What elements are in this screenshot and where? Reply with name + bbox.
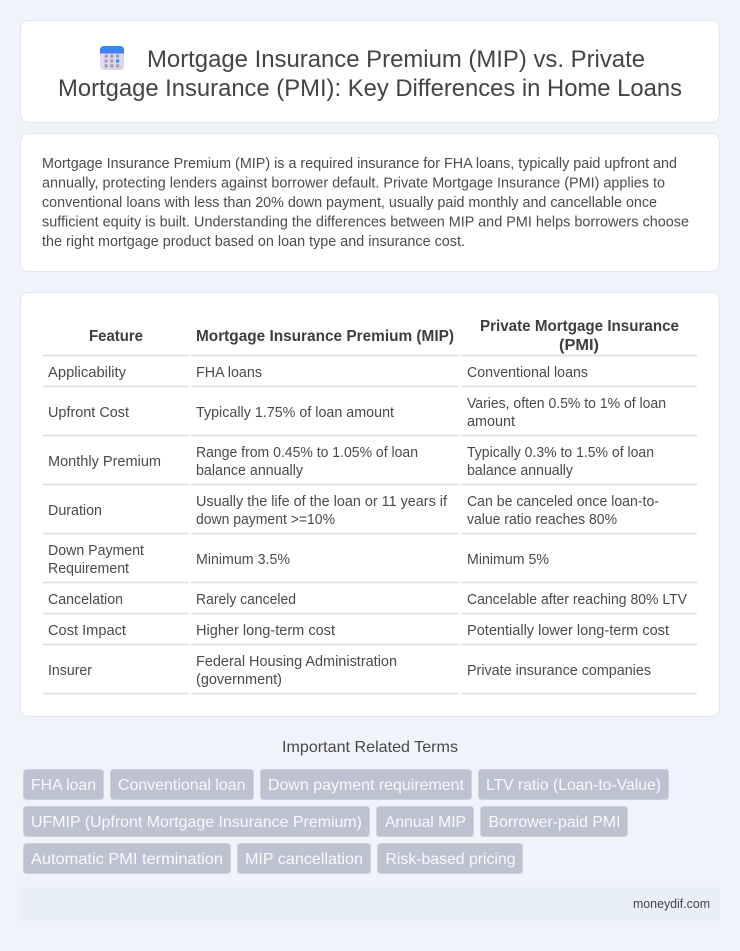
table header row <box>89 318 679 354</box>
row: duration <box>48 494 659 528</box>
row: applicability <box>48 365 588 381</box>
panel: introduction text: annually, protecting lenders against borrower default. Private Mortgage Insurance (PMI) applies to <box>42 176 665 192</box>
table header row: Feature <box>89 328 143 345</box>
row: cancelation <box>48 592 687 608</box>
row: insurer: Private insurance companies <box>467 663 651 679</box>
tag: Conventional loan: Conventional loan <box>118 777 246 794</box>
row: down payment requirement: Down Payment <box>48 543 144 559</box>
tag: Borrower-paid PMI: Borrower-paid PMI <box>488 814 620 831</box>
row: down payment requirement: Minimum 5% <box>467 552 549 568</box>
row: upfront cost: Upfront Cost <box>48 405 129 421</box>
panel: related term tags <box>24 770 668 874</box>
footer bar: moneydif.com <box>633 896 710 911</box>
row: insurer <box>48 654 651 688</box>
tag: Down payment requirement: Down payment requirement <box>268 777 465 794</box>
tag: LTV ratio: LTV ratio (Loan-to-Value) <box>486 777 661 794</box>
row: upfront cost: amount <box>467 414 515 430</box>
tag: Automatic PMI termination <box>24 844 230 874</box>
tag: Risk-based pricing: Risk-based pricing <box>386 851 516 868</box>
row: duration: down payment >=10% <box>196 512 335 528</box>
panel: introduction text: Mortgage Insurance Premium (MIP) is a required insurance for FHA loans, typically paid upfront and <box>42 156 677 172</box>
icon: calendar <box>100 46 124 70</box>
panel: introduction text: the right mortgage product based on loan type and insurance cost. <box>42 234 465 250</box>
row: applicability: Applicability <box>48 365 127 381</box>
row: cost impact: Potentially lower long-term cost <box>467 623 669 639</box>
title <box>58 46 682 102</box>
row: duration: Usually the life of the loan or 11 years if <box>196 494 447 510</box>
panel: comparison table <box>20 292 720 716</box>
tag: Annual MIP <box>376 806 474 836</box>
row: down payment requirement: Requirement <box>48 561 129 577</box>
panel: introduction text: conventional loans with less than 20% down payment, usually paid monthly and cancellable once <box>42 195 657 211</box>
row: monthly premium: Typically 0.3% to 1.5% of loan <box>467 445 654 461</box>
row: cost impact: Cost Impact <box>48 623 126 639</box>
heading: important related terms: Important Related Terms <box>282 739 458 756</box>
row: upfront cost <box>48 396 666 430</box>
row: insurer: (government) <box>196 672 282 688</box>
tag: UFMIP: UFMIP (Upfront Mortgage Insurance Premium) <box>31 814 362 831</box>
tag: Risk-based pricing <box>378 844 522 874</box>
row: duration: Duration <box>48 503 102 519</box>
tag: Conventional loan <box>110 770 254 800</box>
table header row: Mortgage Insurance Premium (MIP) <box>196 328 454 345</box>
row: down payment requirement <box>48 543 549 577</box>
table header row: Private Mortgage Insurance <box>480 318 679 335</box>
row: monthly premium: balance annually <box>467 463 574 479</box>
row: monthly premium: balance annually <box>196 463 304 479</box>
row: cancelation: Rarely canceled <box>196 592 296 608</box>
panel: introduction text <box>20 134 720 272</box>
row: monthly premium: Monthly Premium <box>48 454 161 470</box>
row: monthly premium: Range from 0.45% to 1.05% of loan <box>196 445 418 461</box>
row: applicability: FHA loans <box>196 365 262 381</box>
row: duration: value ratio reaches 80% <box>467 512 617 528</box>
row: monthly premium <box>48 445 654 479</box>
title: Mortgage Insurance Premium (MIP) vs. Private <box>147 46 645 73</box>
panel: introduction text: sufficient equity is built. Understanding the differences between MIP and PMI helps borrowers choose <box>42 214 689 230</box>
tag: MIP cancellation <box>238 844 370 874</box>
tag: UFMIP <box>24 806 370 836</box>
row: insurer: Federal Housing Administration <box>196 654 397 670</box>
tag: Borrower-paid PMI <box>480 806 628 836</box>
row: insurer: Insurer <box>48 663 92 679</box>
row: cancelation: Cancelation <box>48 592 123 608</box>
tag: MIP cancellation: MIP cancellation <box>245 851 363 868</box>
row: upfront cost: Varies, often 0.5% to 1% of loan <box>467 396 666 412</box>
row: upfront cost: Typically 1.75% of loan amount <box>196 405 394 421</box>
table header row: (PMI) <box>559 337 599 354</box>
row: cancelation: Cancelable after reaching 80% LTV <box>467 592 687 608</box>
row: cost impact <box>48 623 669 639</box>
row: down payment requirement: Minimum 3.5% <box>196 552 290 568</box>
footer bar <box>20 887 720 921</box>
row: duration: Can be canceled once loan-to- <box>467 494 659 510</box>
row: applicability: Conventional loans <box>467 365 588 381</box>
title: Mortgage Insurance (PMI): Key Differences in Home Loans <box>58 75 682 102</box>
panel: title header <box>20 20 720 122</box>
tag: FHA loan <box>24 770 104 800</box>
tag: Down payment requirement <box>260 770 472 800</box>
row: cost impact: Higher long-term cost <box>196 623 335 639</box>
tag: Annual MIP: Annual MIP <box>385 814 466 831</box>
tag: FHA loan: FHA loan <box>31 777 96 794</box>
tag: LTV ratio <box>478 770 668 800</box>
tag: Automatic PMI termination: Automatic PMI termination <box>31 851 223 868</box>
